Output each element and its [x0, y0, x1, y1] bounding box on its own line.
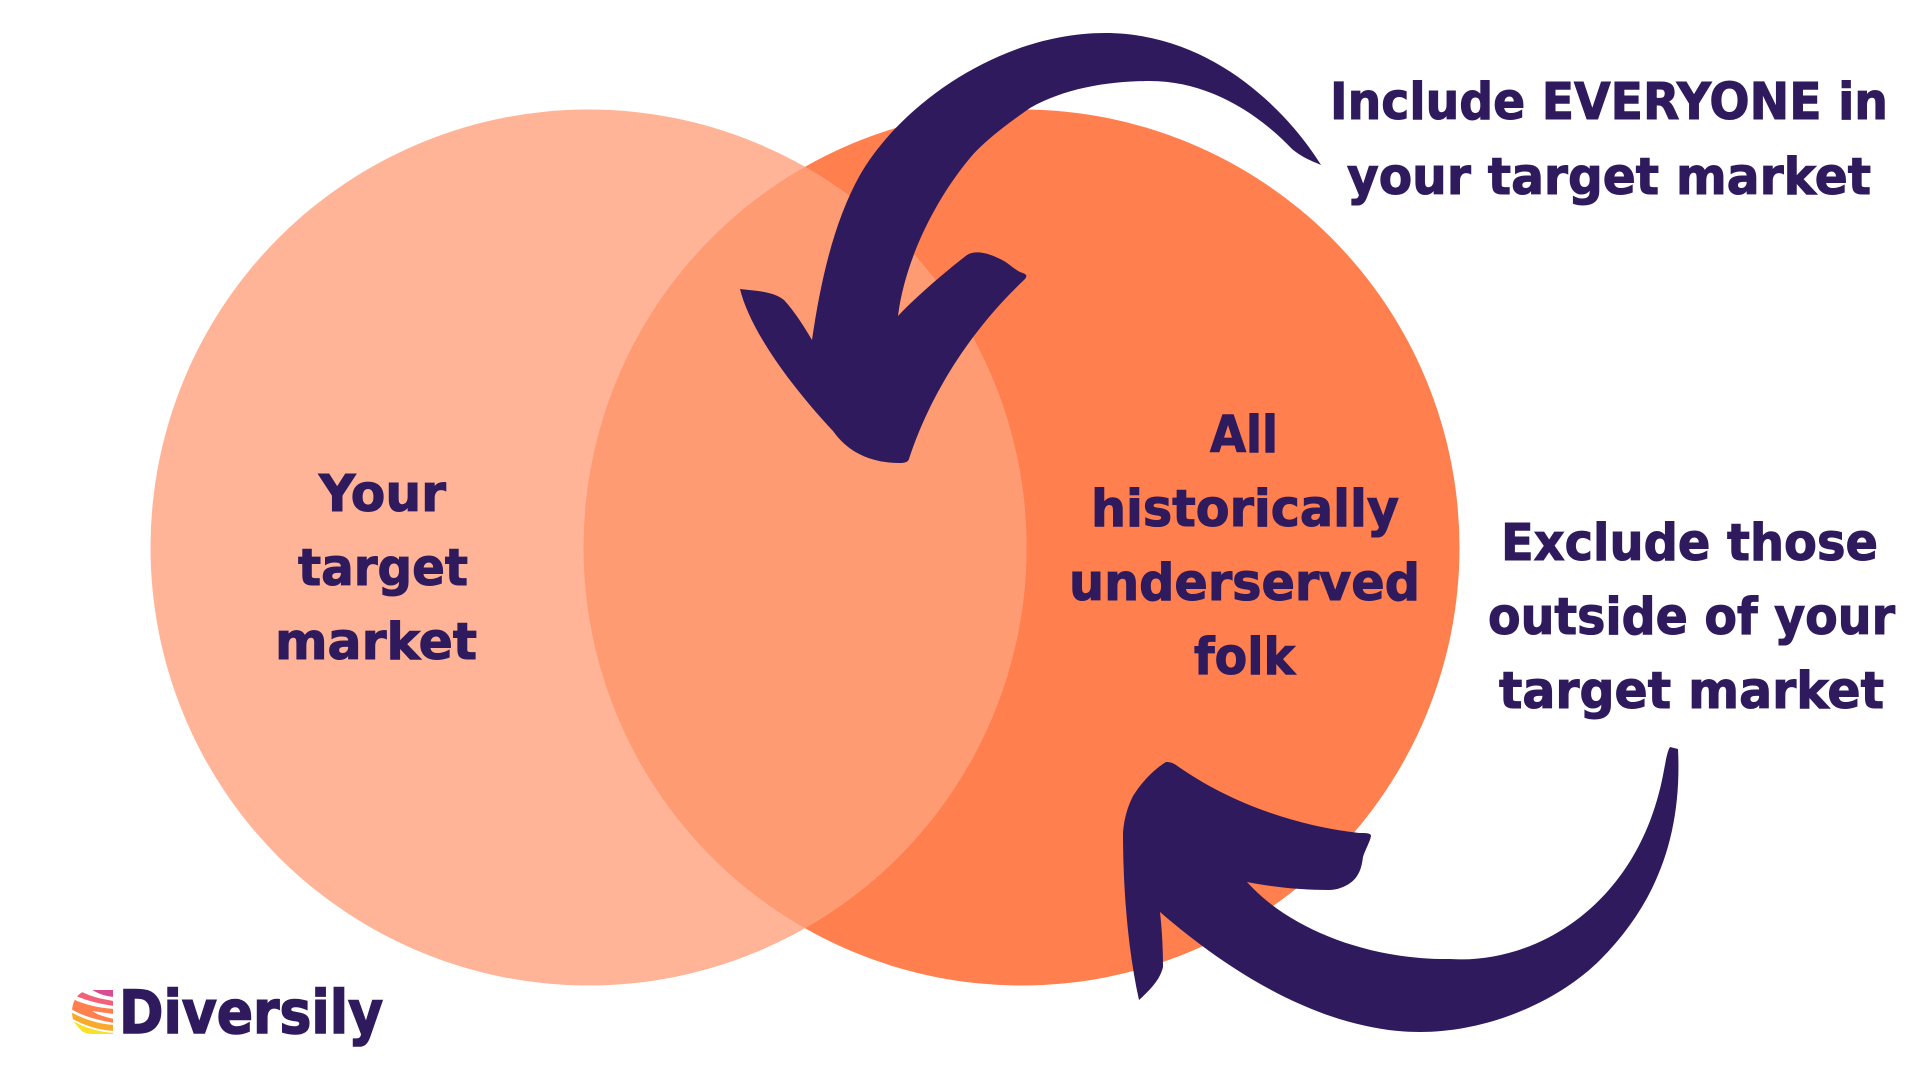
callout: include everyone: your target market	[1347, 148, 1871, 207]
circle overlap	[584, 167, 1026, 928]
callout: include everyone	[1330, 73, 1888, 207]
label: all historically underserved folk: folk	[1194, 628, 1296, 687]
label: all historically underserved folk: underserved	[1069, 554, 1420, 613]
callout: exclude those outside: outside of your	[1488, 588, 1895, 647]
callout: exclude those outside: Exclude those	[1501, 514, 1878, 573]
venn diagram	[150, 110, 1460, 986]
label: your target market: Your	[318, 465, 446, 524]
arrow: from include callout into overlap	[740, 33, 1321, 463]
label: your target market: target	[298, 539, 468, 598]
circle: your target market	[150, 110, 1026, 986]
label: your target market	[275, 465, 477, 672]
logo: Diversily	[72, 986, 384, 1047]
circle: all historically underserved folk	[584, 110, 1460, 986]
label: all historically underserved folk: historically	[1091, 480, 1399, 539]
label: all historically underserved folk	[1069, 406, 1420, 687]
logo wordmark: Diversily	[119, 978, 383, 1048]
callout: include everyone: Include EVERYONE in	[1330, 73, 1888, 132]
arrow: from exclude callout into right circle	[1123, 747, 1678, 1032]
label: your target market: market	[275, 613, 477, 672]
label: all historically underserved folk: All	[1210, 406, 1278, 465]
callout: exclude those outside	[1488, 514, 1895, 721]
callout: exclude those outside: target market	[1499, 662, 1884, 721]
icon: striped globe mark	[71, 989, 114, 1035]
